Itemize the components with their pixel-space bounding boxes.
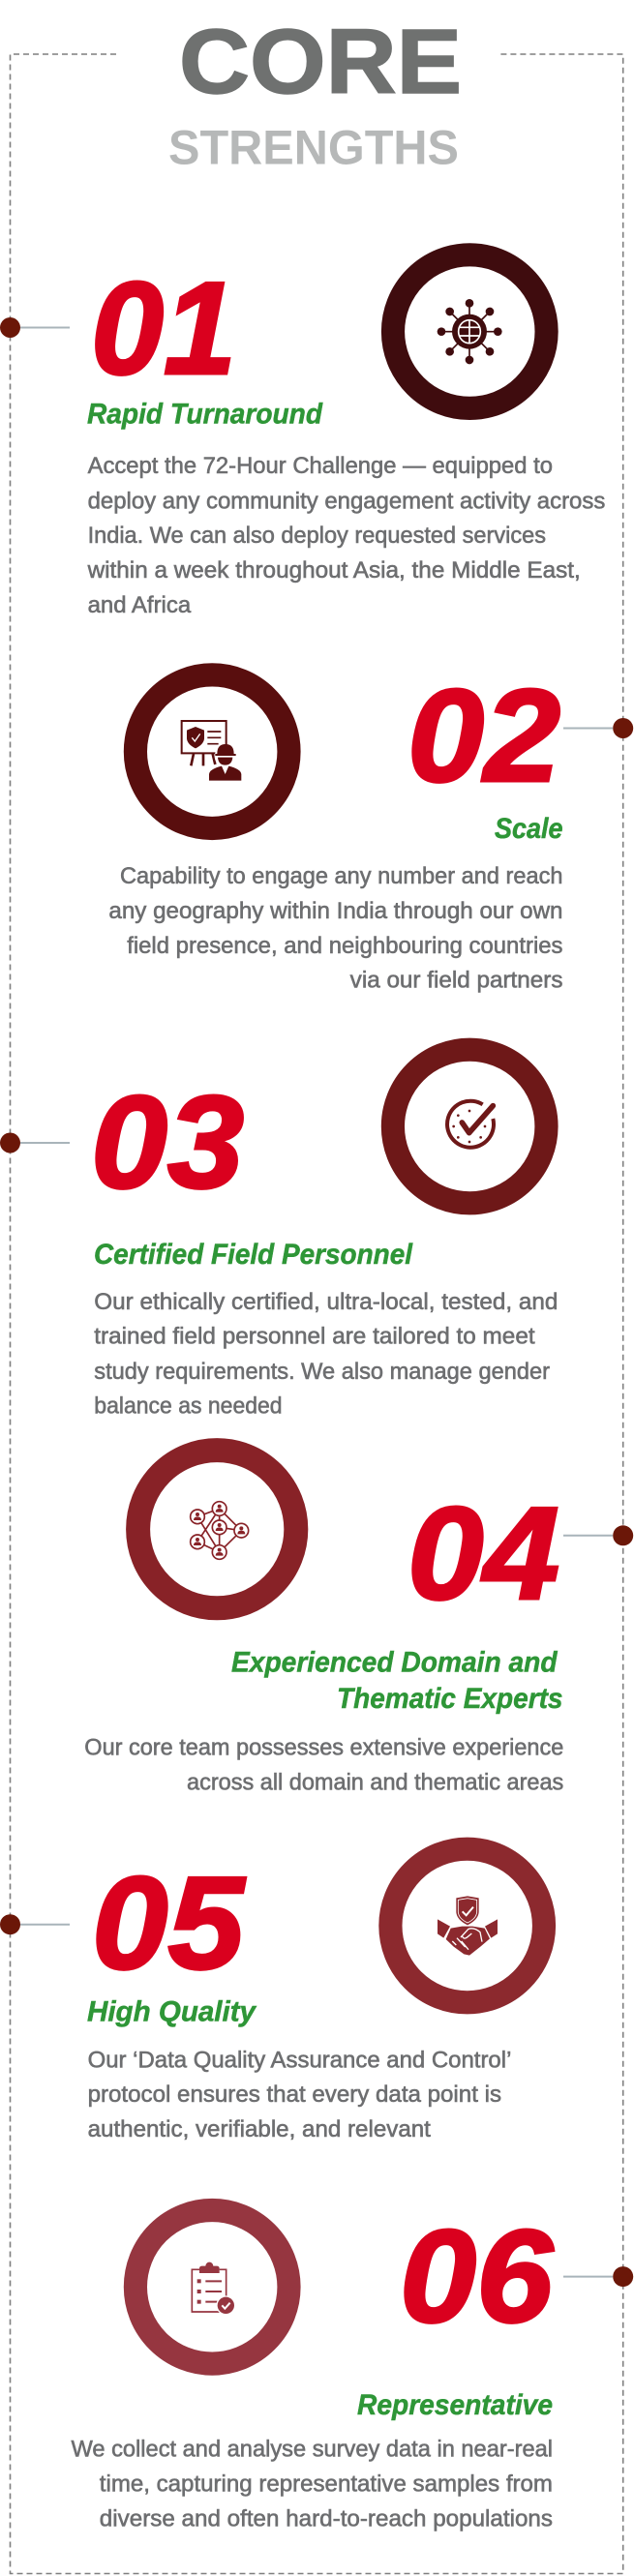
connector 04 [563,1525,633,1545]
number 01: 01 [91,255,236,402]
body text: via our field partners [350,968,563,994]
connector 02 [563,718,633,738]
title: CORE [179,11,462,113]
body text [88,2048,511,2142]
body text: protocol ensures that every data point is [88,2082,501,2108]
panel: 02 scale [108,662,633,994]
icon: clock with check [393,1050,546,1203]
body text: diverse and often hard-to-reach populations [100,2505,553,2531]
icon: presenter with helmet [136,674,288,828]
panel: 05 high quality [0,1849,544,2142]
body text: across all domain and thematic areas [187,1769,563,1796]
body text: field presence, and neighbouring countries [127,933,562,959]
title: STRENGTHS [168,121,459,175]
body text: deploy any community engagement activity across [88,488,605,514]
icon: people network [138,1451,296,1608]
body text: Capability to engage any number and reach [120,863,563,889]
number 06: 06 [400,2202,554,2350]
connector 01 [0,317,70,338]
number 02: 02 [408,662,560,809]
body text [94,1289,558,1420]
icon: handshake with shield [390,1849,544,2002]
body text [87,453,605,618]
panel: 03 certified field personnel [0,1050,558,1420]
body text: and Africa [88,592,192,618]
icon: network globe [393,255,547,408]
body text [72,2437,553,2531]
heading: Representative [357,2389,553,2421]
body text: Our ethically certified, ultra-local, tested, and [94,1289,558,1315]
body text: Our core team possesses extensive experience [84,1734,563,1760]
heading: Thematic Experts [337,1683,563,1715]
connector 03 [0,1132,70,1153]
heading: Experienced Domain and [231,1646,558,1678]
body text: trained field personnel are tailored to meet [94,1324,535,1350]
body text: any geography within India through our own [108,898,563,924]
body text [84,1734,563,1796]
panel: 04 domain experts [84,1451,633,1796]
icon: clipboard checklist [136,2210,288,2364]
number 03: 03 [91,1068,244,1215]
body text: study requirements. We also manage gender [94,1359,550,1385]
panel: 06 representative [72,2202,633,2531]
number 05: 05 [92,1849,246,1996]
number 04: 04 [408,1480,559,1627]
body text: India. We can also deploy requested services [88,523,546,549]
body text: Accept the 72-Hour Challenge — equipped to [88,453,553,479]
body text: Our ‘Data Quality Assurance and Control’ [88,2048,511,2073]
body text: We collect and analyse survey data in near-real [72,2437,553,2463]
body text: time, capturing representative samples from [100,2471,553,2497]
body text [108,863,563,994]
panel: 01 rapid turnaround [0,255,605,618]
body text: within a week throughout Asia, the Middle East, [87,557,581,584]
heading [231,1646,563,1715]
heading: Scale [495,813,563,845]
body text: balance as needed [94,1393,283,1420]
heading: Rapid Turnaround [87,399,323,431]
title [168,11,462,175]
heading: High Quality [87,1996,257,2028]
heading: Certified Field Personnel [94,1239,413,1271]
body text: authentic, verifiable, and relevant [88,2116,431,2142]
connector 05 [0,1914,70,1934]
connector 06 [563,2266,633,2287]
